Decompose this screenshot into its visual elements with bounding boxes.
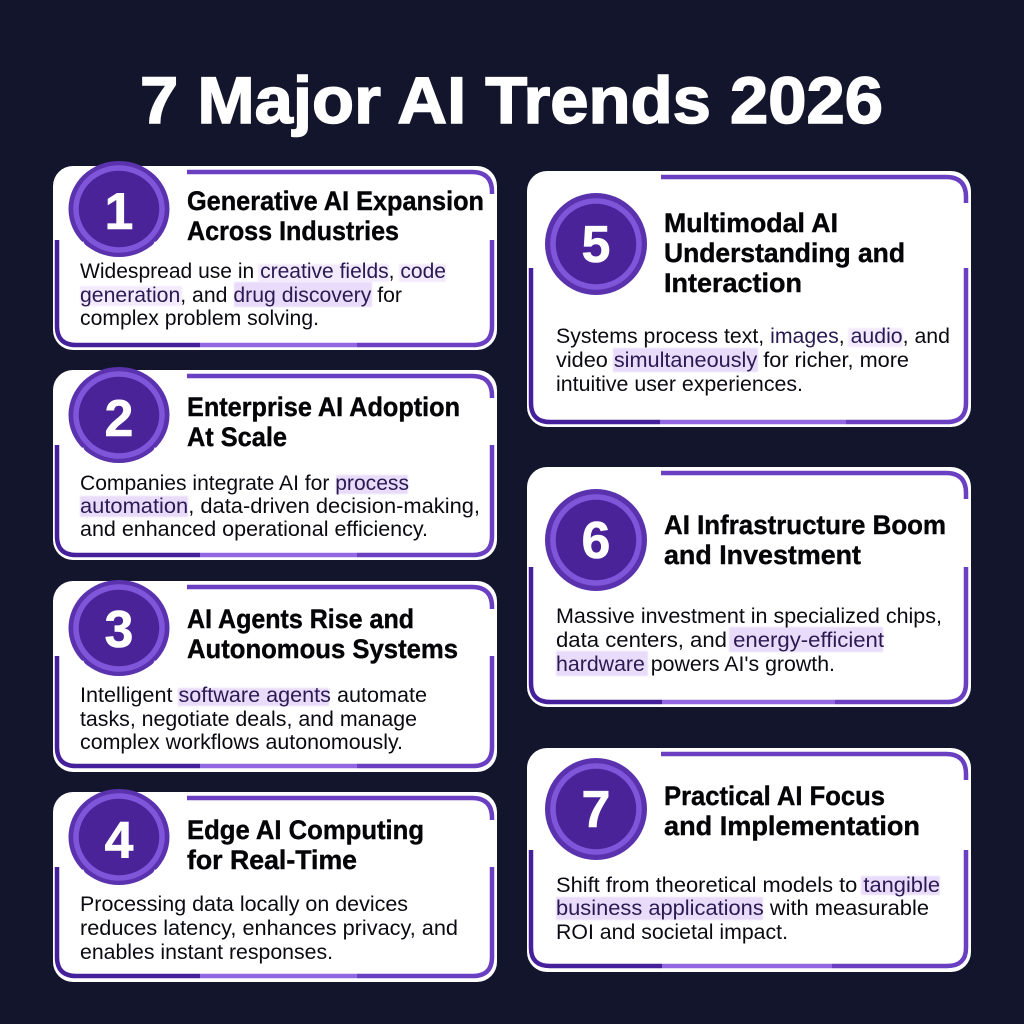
heading: trend 5: Multimodal AI [664, 208, 838, 238]
panel: trend 5 [527, 171, 971, 427]
text block: trend 6: hardware powers AI's growth. [556, 652, 835, 676]
text block: trend 3: Intelligent software agents automate [80, 683, 427, 707]
icon: number badge 7: 7 [582, 781, 610, 839]
heading: trend 3: AI Agents Rise and [187, 604, 414, 634]
heading: trend 7: Practical AI Focus [664, 781, 885, 811]
icon: number badge 1: 1 [105, 183, 133, 241]
heading: trend 3: Autonomous Systems [187, 634, 458, 664]
heading: trend 4: for Real-Time [187, 845, 357, 875]
text block: trend 1 [80, 259, 446, 330]
icon: number badge 4 [68, 789, 170, 885]
icon: number badge 5: 5 [582, 216, 610, 274]
panel: trend 6 [527, 467, 971, 707]
icon: number badge 6 [545, 489, 647, 591]
panel: trend 4 [53, 789, 497, 982]
icon: number badge 3: 3 [105, 601, 133, 659]
heading: trend 2: At Scale [187, 422, 287, 452]
panel: trend 3 [53, 580, 497, 772]
heading: trend 6: and Investment [664, 540, 861, 570]
text block: trend 3: tasks, negotiate deals, and manage [80, 707, 417, 731]
text block: trend 4: enables instant responses. [80, 940, 333, 964]
text block: trend 1: complex problem solving. [80, 306, 319, 330]
title: 7 Major AI Trends 2026 [140, 63, 883, 137]
icon: number badge 3 [68, 580, 170, 676]
text block: trend 7: Shift from theoretical models to tangible [556, 873, 940, 897]
icon: number badge 1 [68, 161, 170, 257]
heading: trend 6 [664, 510, 946, 570]
heading: trend 1: Generative AI Expansion [187, 186, 484, 216]
text block: trend 1: generation, and drug discovery for [80, 283, 402, 307]
heading: trend 2: Enterprise AI Adoption [187, 392, 460, 422]
text block: trend 4 [80, 892, 458, 964]
panel: trend 1 [53, 161, 497, 350]
heading: trend 2 [187, 392, 460, 452]
heading: trend 6: AI Infrastructure Boom [664, 510, 946, 540]
text block: trend 2: automation, data-driven decision-making, [80, 494, 480, 518]
heading: trend 5: Interaction [664, 268, 802, 298]
text block: trend 5: intuitive user experiences. [556, 372, 803, 396]
heading: trend 5 [664, 208, 905, 298]
text block: trend 4: reduces latency, enhances privacy, and [80, 916, 458, 940]
text block: trend 5 [556, 324, 950, 396]
text block: trend 3: complex workflows autonomously. [80, 730, 403, 754]
text block: trend 2 [80, 471, 480, 541]
text block: trend 2: and enhanced operational efficiency. [80, 517, 428, 541]
icon: number badge 7 [545, 758, 647, 860]
heading: trend 4 [187, 815, 424, 875]
text block: trend 2: Companies integrate AI for process [80, 471, 409, 495]
icon: number badge 5 [545, 193, 647, 295]
heading: trend 1 [187, 186, 484, 246]
heading: trend 5: Understanding and [664, 238, 905, 268]
heading: trend 4: Edge AI Computing [187, 815, 424, 845]
text block: trend 3 [80, 683, 427, 754]
icon: number badge 2: 2 [105, 390, 133, 448]
text block: trend 6: Massive investment in specialized chips, [556, 604, 942, 628]
text block: trend 5: video simultaneously for richer, more [556, 348, 909, 372]
heading: trend 3 [187, 604, 458, 664]
panel: trend 2 [53, 367, 497, 560]
text block: trend 6 [556, 604, 942, 676]
text block: trend 7: business applications with measurable [556, 896, 929, 920]
heading: trend 1: Across Industries [187, 216, 399, 246]
icon: number badge 4: 4 [105, 812, 134, 870]
icon: number badge 6: 6 [582, 512, 610, 570]
heading: trend 7: and Implementation [664, 811, 920, 841]
text block: trend 7: ROI and societal impact. [556, 920, 788, 944]
text block: trend 5: Systems process text, images, audio, and [556, 324, 950, 348]
text block: trend 6: data centers, and energy-efficient [556, 628, 884, 652]
text block: trend 4: Processing data locally on devices [80, 892, 408, 916]
heading: trend 7 [664, 781, 920, 841]
icon: number badge 2 [68, 367, 170, 463]
text block: trend 7 [556, 873, 940, 944]
panel: trend 7 [527, 748, 971, 972]
text block: trend 1: Widespread use in creative fields, code [80, 259, 446, 283]
